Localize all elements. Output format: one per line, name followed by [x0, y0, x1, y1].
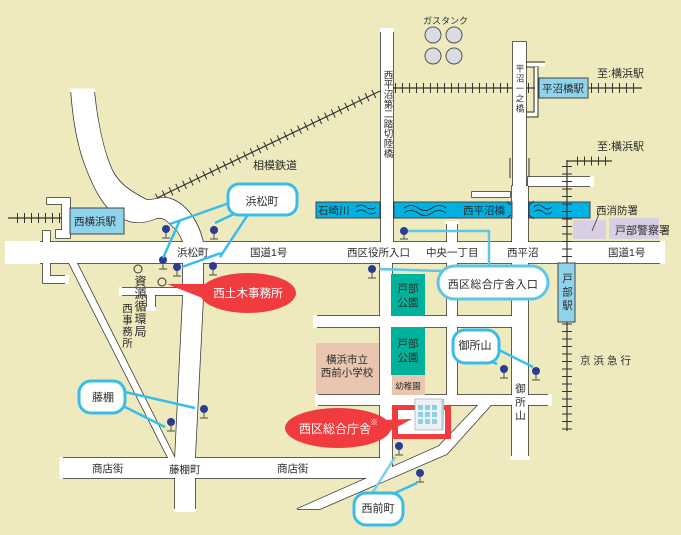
road and railway labels: 平沼一之橋: [515, 64, 525, 114]
road and railway labels: 資源循環局: [133, 275, 147, 338]
road and railway labels: 藤棚町: [169, 463, 201, 476]
river: Ishizaki River: [316, 201, 590, 219]
river: Ishizaki River: 西平沼橋: [463, 204, 505, 217]
road and railway labels: 至:横浜駅: [597, 139, 644, 153]
road and railway labels: 国道1号: [608, 246, 645, 259]
parks, kindergarten and school: 戸部: [398, 283, 419, 295]
road and railway labels: 西事務所: [121, 303, 133, 349]
bus stop pins: [159, 225, 540, 482]
road and railway labels: 御所山: [514, 382, 526, 424]
parks, kindergarten and school: 横浜市立: [326, 353, 368, 366]
road and railway labels: 商店街: [92, 462, 124, 475]
parks, kindergarten and school: 公園: [398, 297, 418, 309]
station: Nishi-Yokohama: [70, 208, 124, 234]
road and railway labels: 西平沼: [507, 246, 538, 259]
callout: Fujidana: [79, 381, 195, 427]
road and railway labels: 国道1号: [250, 246, 287, 259]
road and railway labels: 至:横浜駅: [597, 66, 644, 80]
road and railway labels: 相模鉄道: [253, 158, 297, 172]
river: Ishizaki River: 石崎川: [318, 204, 350, 217]
red callout: Nishi civil engineering office: [167, 273, 296, 313]
road and railway labels: 西区役所入口: [347, 246, 410, 259]
gas tanks: ガスタンク: [423, 16, 468, 26]
parks, kindergarten and school: 公園: [398, 352, 418, 364]
callout: Nishi ward office entrance: [379, 231, 548, 299]
road and railway labels: 京浜急行: [580, 354, 634, 367]
callout: Hamamatsucho: 浜松町: [246, 194, 278, 208]
station: Hiranumabashi: [539, 78, 588, 98]
road and railway labels: 商店街: [277, 462, 309, 475]
road and railway labels: [92, 64, 645, 476]
callout: Hamamatsucho: [163, 184, 297, 267]
parks, kindergarten and school: 西前小学校: [321, 366, 374, 379]
facility markers: [134, 265, 166, 286]
red callout: Nishi ward office: ※: [370, 418, 378, 427]
callout: Fujidana: 藤棚: [92, 390, 114, 404]
callout: Nishimaecho: 西前町: [362, 501, 394, 515]
road and railway labels: 中央一丁目: [426, 246, 478, 259]
callout: Goshoyama: [453, 330, 533, 367]
red callout: Nishi ward office: 西区総合庁舎: [299, 421, 371, 436]
road and railway labels: 浜松町: [177, 246, 209, 259]
parks, kindergarten and school: [316, 274, 425, 395]
station: Tobe: [558, 263, 575, 322]
target building: Nishi ward office: [392, 399, 451, 439]
parks, kindergarten and school: 幼稚園: [395, 381, 421, 391]
station: Tobe: 戸部駅: [561, 273, 573, 314]
callout: Nishimaecho: [354, 457, 417, 525]
facility blocks: fire station and police station: 西消防署: [596, 204, 638, 217]
callout: Nishi ward office entrance: 西区総合庁舎入口: [448, 277, 538, 291]
railway: Keikyu line: [567, 160, 612, 431]
facility blocks: fire station and police station: 戸部警察署: [615, 223, 670, 237]
facility blocks: fire station and police station: [573, 204, 670, 239]
station: Nishi-Yokohama: 西横浜駅: [74, 215, 116, 228]
red callout: Nishi civil engineering office: 西土木事務所: [213, 286, 283, 300]
road and railway labels: 西平沼第二踏切陸橋: [382, 70, 393, 159]
red callout: Nishi ward office: [285, 408, 412, 448]
railway: Sotetsu and Hiranuma lines: [8, 88, 642, 218]
callout: Goshoyama: 御所山: [458, 338, 492, 352]
station: Hiranumabashi: 平沼橋駅: [542, 82, 584, 95]
gas tanks: [423, 16, 468, 64]
parks, kindergarten and school: 戸部: [398, 338, 419, 350]
